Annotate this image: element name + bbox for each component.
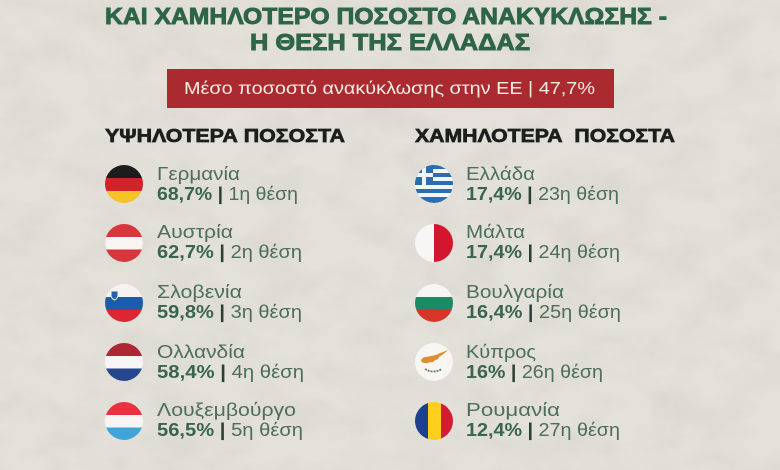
heading: lowest rates: ΧΑΜΗΛΟΤΕΡΑ ΠΟΣΟΣΤΑ — [415, 125, 675, 146]
country and rate: Σλοβενία — [157, 282, 242, 302]
country and rate — [466, 400, 620, 440]
country and rate: Λουξεμβούργο — [157, 400, 296, 420]
country and rate: 58,4% | 4η θέση — [157, 362, 304, 382]
row: Slovenia — [105, 282, 302, 322]
callout: EU average recycling rate: Μέσο ποσοστό ανακύκλωσης στην ΕΕ | 47,7% — [184, 78, 595, 98]
row: Greece — [415, 164, 619, 204]
country and rate: Βουλγαρία — [466, 282, 564, 302]
country and rate: Μάλτα — [466, 222, 525, 242]
country and rate: Ολλανδία — [157, 342, 245, 362]
icon: flag of Bulgaria — [415, 284, 453, 322]
icon: flag of Greece — [415, 165, 453, 203]
row: Bulgaria — [415, 282, 621, 322]
country and rate — [157, 282, 302, 322]
icon: flag of Slovenia — [105, 284, 143, 322]
row: Austria — [105, 222, 302, 262]
row: Netherlands — [105, 342, 304, 382]
country and rate — [466, 342, 603, 382]
country and rate — [157, 164, 298, 204]
country and rate: 59,8% | 3η θέση — [157, 302, 302, 322]
country and rate: Αυστρία — [157, 222, 233, 242]
icon: flag of Germany — [105, 165, 143, 203]
callout: EU average recycling rate — [167, 69, 614, 108]
icon: flag of Austria — [105, 224, 143, 262]
panel: lowest rates list — [415, 164, 621, 440]
country and rate: 68,7% | 1η θέση — [157, 184, 298, 204]
icon: flag of Malta — [415, 224, 453, 262]
heading: highest rates: ΥΨΗΛΟΤΕΡΑ ΠΟΣΟΣΤΑ — [105, 125, 345, 146]
country and rate — [466, 282, 621, 322]
country and rate: 56,5% | 5η θέση — [157, 420, 303, 440]
country and rate: Ρουμανία — [466, 400, 560, 420]
icon: flag of Luxembourg — [105, 402, 143, 440]
country and rate: 16% | 26η θέση — [466, 362, 603, 382]
title — [105, 3, 667, 55]
country and rate: 62,7% | 2η θέση — [157, 242, 302, 262]
icon: flag of the Netherlands — [105, 343, 143, 382]
country and rate — [157, 400, 303, 440]
country and rate: 17,4% | 23η θέση — [466, 184, 619, 204]
country and rate: Ελλάδα — [466, 164, 535, 184]
title: Η ΘΕΣΗ ΤΗΣ ΕΛΛΑΔΑΣ — [250, 29, 530, 55]
row: Germany — [105, 164, 298, 204]
country and rate: 17,4% | 24η θέση — [466, 242, 620, 262]
country and rate: 12,4% | 27η θέση — [466, 420, 620, 440]
title: ΚΑΙ ΧΑΜΗΛΟΤΕΡΟ ΠΟΣΟΣΤΟ ΑΝΑΚΥΚΛΩΣΗΣ - — [105, 3, 667, 29]
country and rate: Γερμανία — [157, 164, 240, 184]
row: Malta — [415, 222, 620, 262]
icon: flag of Cyprus — [415, 343, 453, 381]
row: Luxembourg — [105, 400, 303, 440]
country and rate: Κύπρος — [466, 342, 536, 362]
country and rate — [466, 164, 619, 204]
panel: highest rates list — [105, 164, 304, 440]
country and rate — [466, 222, 620, 262]
country and rate: 16,4% | 25η θέση — [466, 302, 621, 322]
country and rate — [157, 222, 302, 262]
row: Cyprus — [415, 342, 603, 382]
row: Romania — [415, 400, 620, 440]
country and rate — [157, 342, 304, 382]
icon: flag of Romania — [415, 402, 453, 440]
